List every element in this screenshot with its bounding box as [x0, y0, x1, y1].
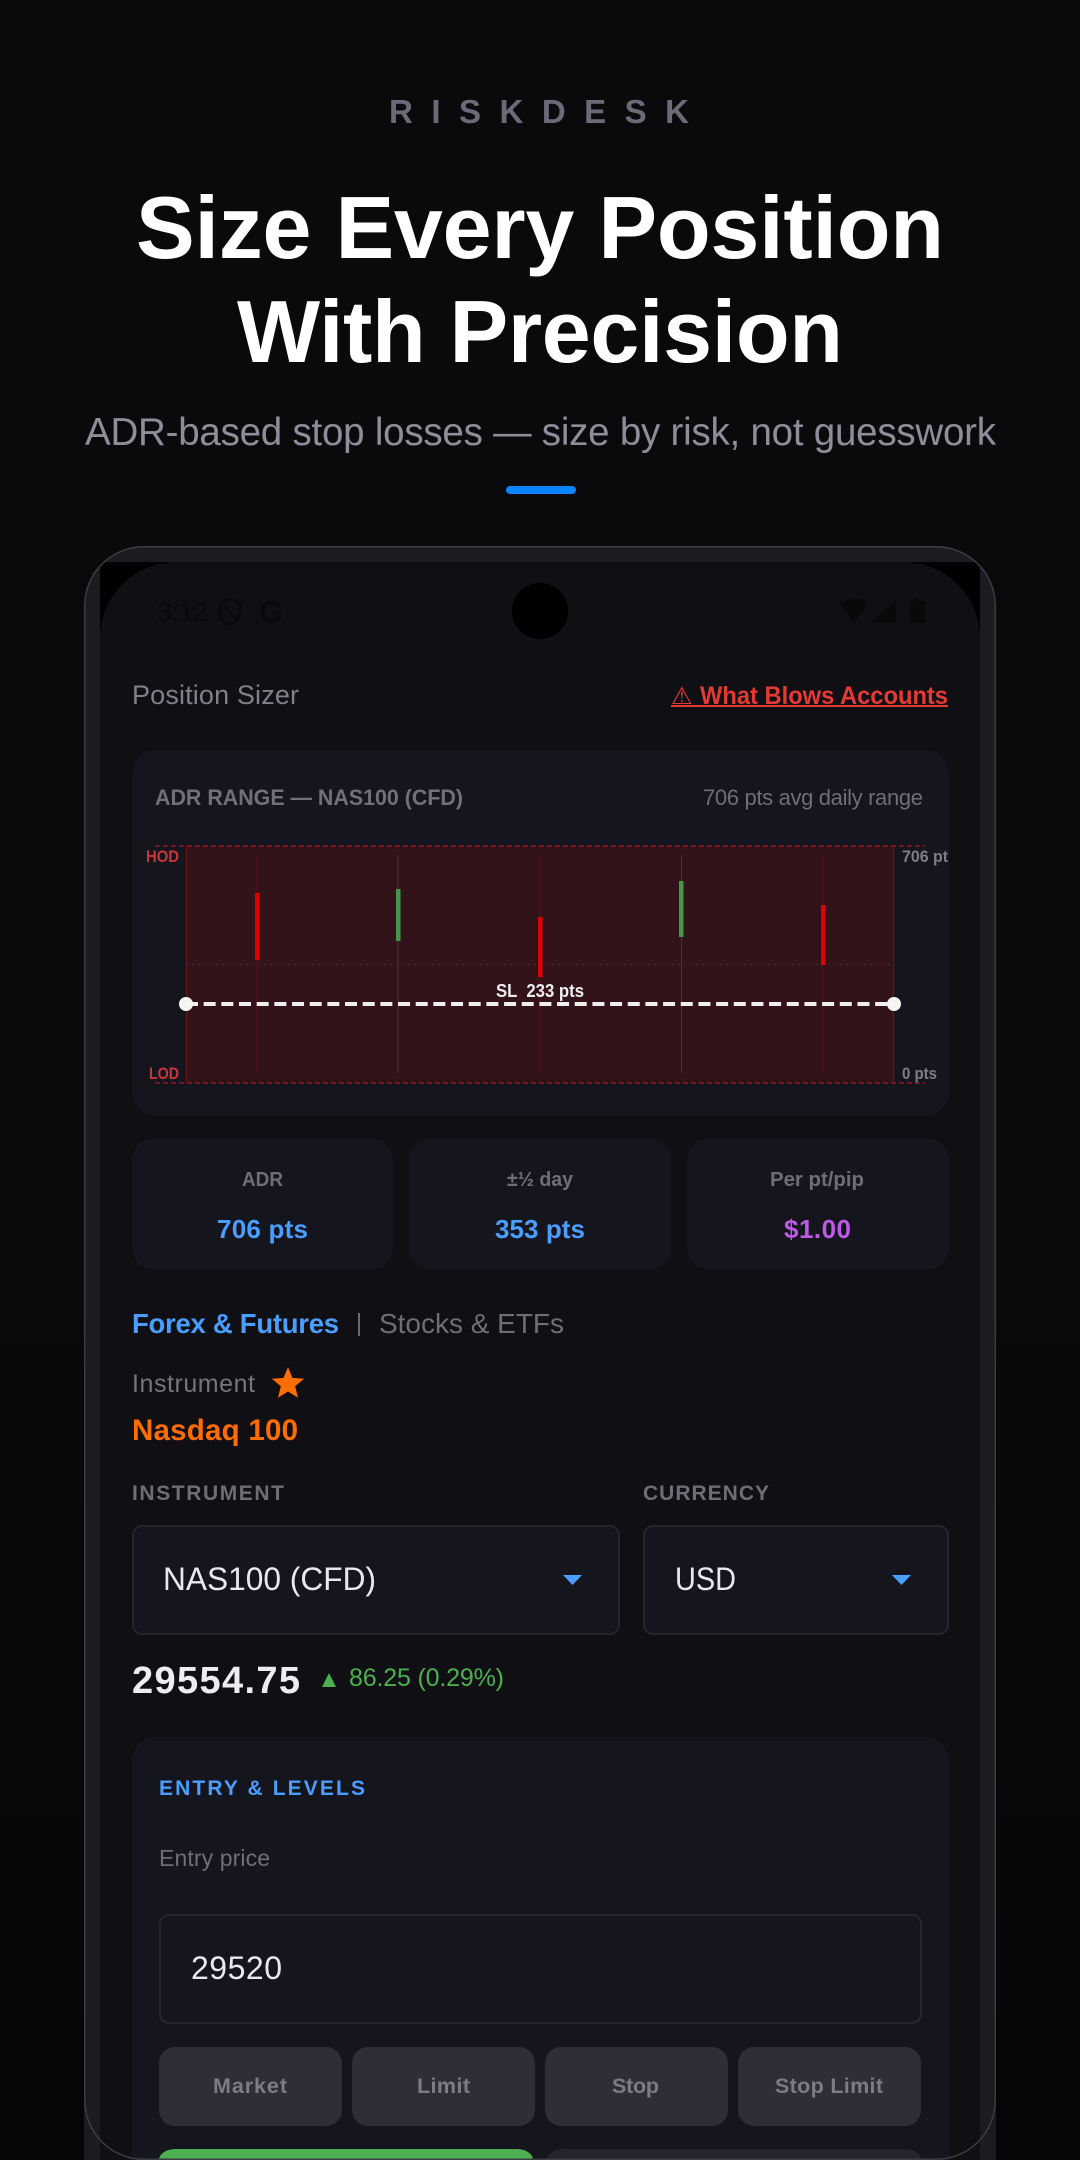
range chart: [146, 846, 957, 1083]
panel heading: ENTRY & LEVELS: [159, 1777, 365, 1800]
icon: signal: [871, 599, 896, 623]
camera punch-hole: [512, 583, 568, 639]
icon: shield: [220, 599, 240, 625]
instrument name: Nasdaq 100: [132, 1414, 298, 1447]
live price: 86.25 (0.29%): [349, 1664, 504, 1692]
order type: limit: Limit: [417, 2074, 470, 2098]
chart subheading: 706 pts avg daily range: [703, 785, 923, 810]
phone outline: [85, 547, 995, 2159]
top value label: 706 pts: [902, 848, 957, 866]
order type: stop: Stop: [612, 2074, 659, 2098]
entry price input: [160, 1915, 921, 2023]
LOD label: LOD: [149, 1065, 179, 1083]
market tabs: [132, 1308, 564, 1339]
order type: limit: [352, 2047, 535, 2126]
clock: 3:12: [157, 597, 208, 627]
warning link: ⚠: [671, 682, 693, 710]
instrument favourite row: Instrument: [132, 1370, 255, 1398]
stat card: per pip: Per pt/pip: [770, 1169, 864, 1191]
candle 3: [538, 855, 542, 1073]
brand label: RISKDESK: [389, 93, 689, 130]
entry price label: Entry price: [159, 1845, 270, 1871]
warning link: What Blows Accounts: [700, 682, 948, 710]
title: With Precision: [237, 282, 843, 381]
icon: wifi: [840, 598, 868, 623]
HOD label: HOD: [146, 848, 179, 866]
currency dropdown: [644, 1526, 948, 1634]
phone mockup: [84, 546, 996, 2160]
order type: stop: [545, 2047, 728, 2126]
stat card: half day: 353 pts: [495, 1214, 585, 1244]
market tabs: Forex & Futures: [132, 1308, 339, 1339]
stat card: per pip: [687, 1139, 949, 1269]
icon: battery: [910, 598, 925, 623]
order type: market: [159, 2047, 342, 2126]
instrument favourite row: [132, 1367, 304, 1398]
stat card: ADR: [132, 1139, 393, 1269]
instrument dropdown: NAS100 (CFD): [163, 1561, 376, 1597]
stat card: ADR: ADR: [242, 1169, 284, 1191]
order type: market: Market: [213, 2074, 287, 2098]
accent bar: [506, 486, 576, 494]
screen header: [132, 680, 948, 710]
chart heading: ADR RANGE — NAS100 (CFD): [155, 785, 463, 810]
icon: star: [272, 1367, 304, 1398]
panel: entry and levels: [132, 1737, 949, 2160]
side button: buy: [159, 2149, 533, 2160]
live price: [132, 1660, 504, 1702]
stat card: per pip: $1.00: [784, 1214, 851, 1244]
stat card: half day: ±½ day: [507, 1169, 574, 1191]
currency dropdown: USD: [675, 1561, 736, 1597]
order type: stop limit: Stop Limit: [775, 2074, 883, 2098]
instrument label: INSTRUMENT: [132, 1482, 284, 1505]
entry price input: 29520: [191, 1950, 282, 1986]
instrument dropdown: [133, 1526, 619, 1634]
live price: 29554.75: [132, 1660, 300, 1702]
candle 5: [821, 855, 826, 1073]
bottom value label: 0 pts: [902, 1065, 937, 1083]
subtitle: ADR-based stop losses — size by risk, not guesswork: [85, 411, 997, 454]
stat card: half day: [409, 1139, 671, 1269]
side button: sell: [547, 2149, 921, 2160]
stop loss line: [179, 981, 901, 1011]
order type: stop limit: [738, 2047, 921, 2126]
candle 2: [396, 855, 400, 1073]
title: Size Every Position: [136, 178, 944, 277]
candle 1: [255, 855, 260, 1073]
currency label: CURRENCY: [643, 1482, 769, 1505]
title: [136, 178, 944, 381]
stat card: ADR: 706 pts: [217, 1214, 308, 1244]
panel: ADR range chart: [132, 750, 957, 1116]
screen title: Position Sizer: [132, 680, 299, 710]
status bar: [157, 583, 925, 639]
market tabs: Stocks & ETFs: [379, 1308, 564, 1339]
stop loss line: SL 233 pts: [496, 981, 584, 1001]
icon: G: G: [259, 594, 283, 629]
candle 4: [679, 855, 684, 1073]
